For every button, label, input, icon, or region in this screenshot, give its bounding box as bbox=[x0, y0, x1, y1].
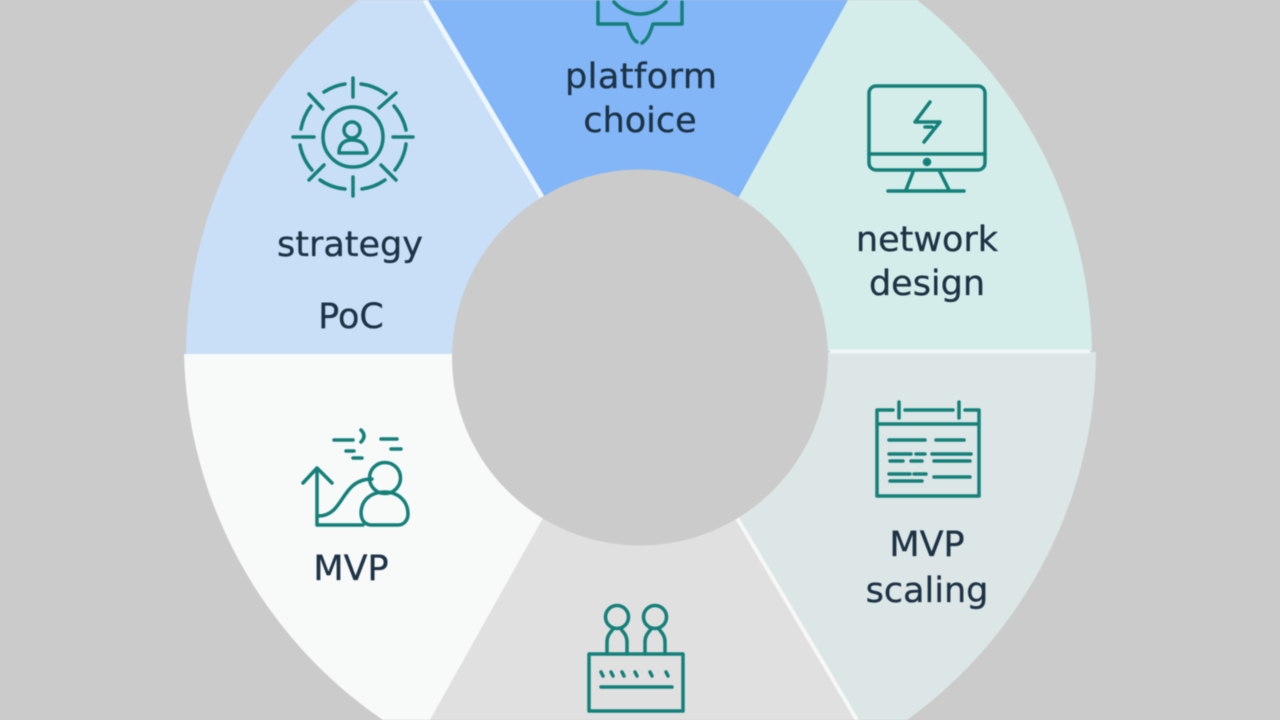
icon: platform badge bbox=[598, 2, 682, 43]
label: MVP scaling: MVP bbox=[889, 525, 965, 565]
icon: calendar bbox=[877, 402, 979, 496]
label: MVP: MVP bbox=[313, 549, 389, 589]
segment: network design bbox=[640, 0, 1092, 357]
segment: bottom stage bbox=[430, 357, 857, 720]
icon: growth chart with person bbox=[303, 430, 408, 525]
label: strategy: strategy bbox=[277, 225, 423, 265]
label: network design: design bbox=[869, 264, 985, 304]
label: platform choice: choice bbox=[583, 101, 697, 141]
segment: platform choice bbox=[425, 0, 848, 357]
label: platform choice: platform bbox=[565, 57, 717, 97]
segment: strategy PoC bbox=[186, 0, 640, 357]
segment: MVP bbox=[184, 354, 640, 720]
center circle bbox=[452, 170, 828, 546]
label: PoC: PoC bbox=[318, 297, 384, 337]
label: network design bbox=[856, 220, 999, 304]
icon: target with person bbox=[293, 78, 413, 196]
label: platform choice bbox=[565, 57, 717, 141]
segment: MVP scaling bbox=[640, 352, 1096, 720]
icon: two people at a desk bbox=[589, 606, 683, 711]
label: MVP scaling: scaling bbox=[866, 571, 988, 611]
label: MVP scaling bbox=[866, 525, 988, 611]
label: network design: network bbox=[856, 220, 999, 260]
icon: monitor with bolt bbox=[869, 86, 985, 191]
